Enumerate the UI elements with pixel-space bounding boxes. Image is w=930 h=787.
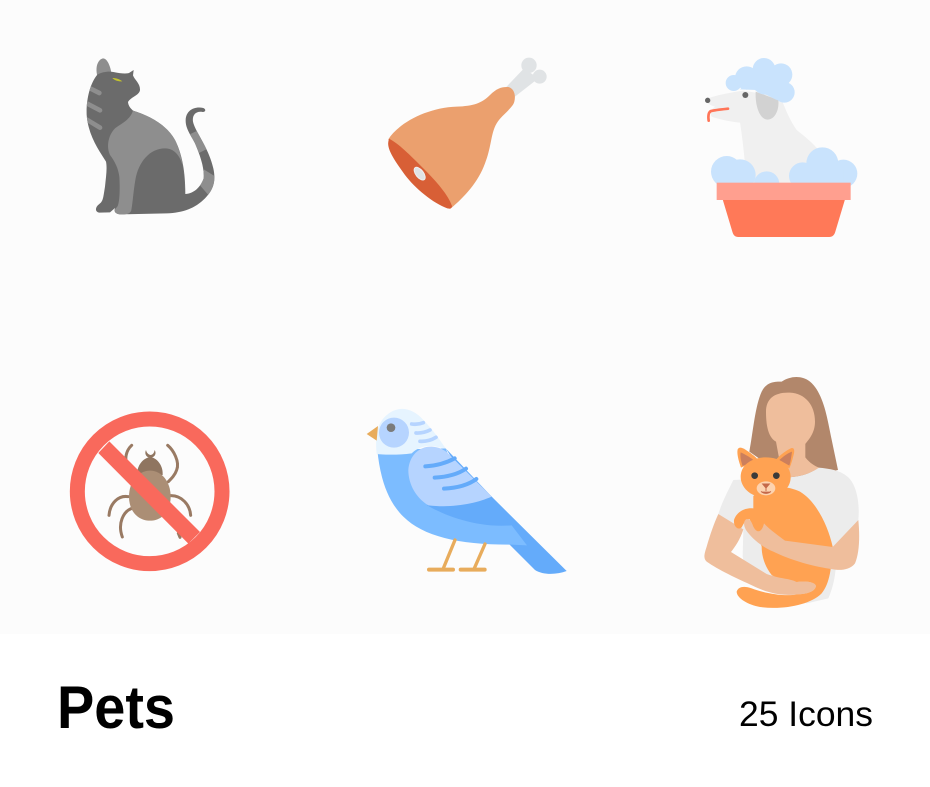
icon: blue budgie: [367, 409, 567, 574]
far arm: [704, 514, 816, 595]
prohibition ring: [77, 419, 222, 564]
dog body: [705, 91, 823, 183]
icon count label: 25 Icons: [739, 695, 873, 734]
icon: no ticks sign: [77, 419, 222, 564]
tick legs: [109, 445, 191, 537]
tick head: [137, 450, 163, 475]
dog tongue: [708, 109, 728, 121]
near arm: [744, 519, 859, 570]
dog ear: [756, 92, 778, 120]
wing: [408, 447, 492, 506]
eye: [379, 418, 409, 448]
chest and front leg: [108, 111, 185, 215]
bath foam: [711, 147, 857, 197]
eye: [112, 78, 122, 81]
beak: [367, 426, 378, 441]
body: [377, 448, 527, 545]
foam on head: [726, 58, 795, 103]
neck and face: [766, 393, 819, 477]
shirt: [718, 468, 859, 603]
head stripes: [412, 423, 436, 441]
icon: woman holding cat: [704, 377, 859, 608]
head: [376, 409, 446, 455]
cat head: [741, 457, 791, 498]
hair: [749, 377, 838, 480]
cat muzzle: [757, 481, 775, 495]
back stripes: [85, 88, 100, 128]
title: Pets: [57, 674, 175, 741]
icon: grey cat: [85, 58, 218, 215]
tail stripes: [190, 131, 214, 195]
icon: dog in bath: [705, 58, 857, 237]
dog eye and nose: [742, 92, 748, 98]
legs: [429, 540, 485, 570]
cat tail and body: [737, 487, 833, 608]
icon: ham leg with bone: [388, 58, 547, 209]
basin: [723, 199, 845, 237]
tail: [446, 448, 567, 574]
tick body: [129, 471, 171, 521]
wing shadow: [427, 467, 512, 526]
cat eyes: [751, 472, 758, 479]
cat ears: [737, 448, 758, 468]
cat paw: [734, 508, 763, 534]
wing stripes: [425, 458, 476, 489]
